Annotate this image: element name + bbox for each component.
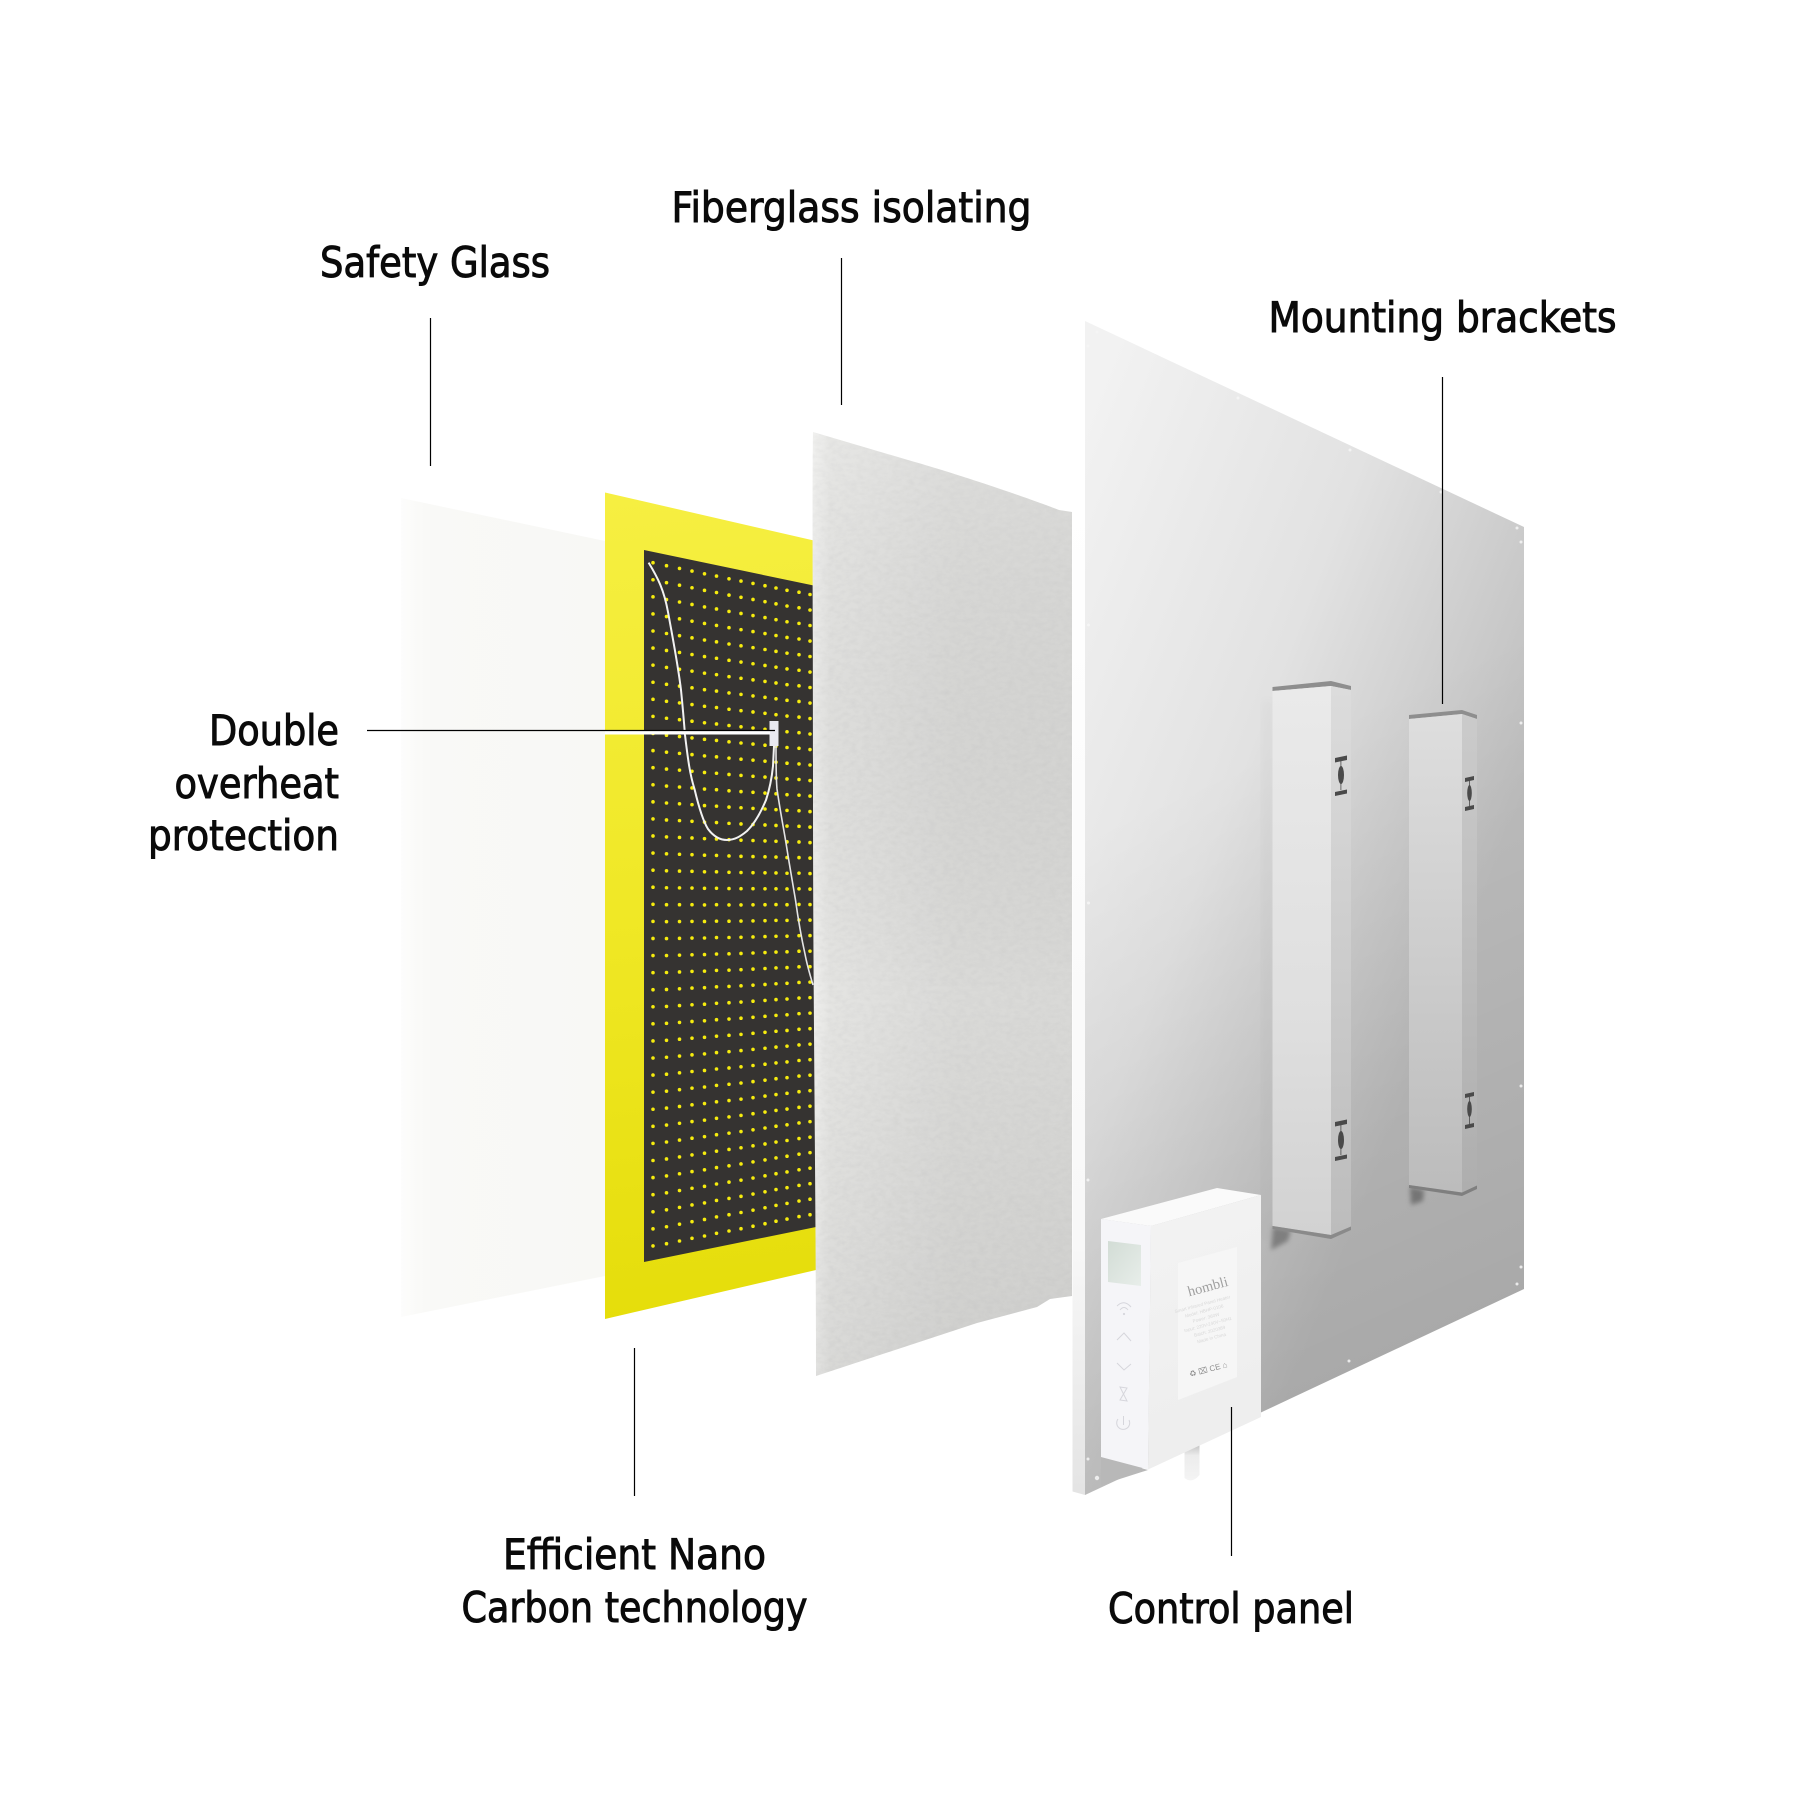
box front face <box>1101 1219 1151 1470</box>
bracket keyhole slots <box>1335 756 1347 1161</box>
panel: nano carbon film layer <box>605 492 816 1319</box>
label: double overheat protection: protection <box>148 811 339 860</box>
display screen <box>1108 1241 1141 1286</box>
plate edge strip <box>1072 505 1085 1495</box>
yellow carbon dots <box>653 563 810 1247</box>
label: fiberglass isolating: Fiberglass isolating <box>672 183 1032 232</box>
icon: wifi <box>1117 1303 1131 1315</box>
dark carbon sheet <box>644 550 816 1262</box>
product label <box>1174 1247 1240 1400</box>
label details: Power: 360W <box>1192 1312 1221 1324</box>
leader line: safety glass <box>430 318 432 466</box>
label: double overheat protection <box>148 706 339 860</box>
label: efficient nano carbon technology: Efficient Nano <box>503 1530 766 1579</box>
label: double overheat protection: Double <box>209 706 339 755</box>
label: double overheat protection: overheat <box>174 759 339 808</box>
certification marks: ♻ ⌧ CE ⌂ <box>1188 1360 1229 1379</box>
overheat sensor <box>770 721 778 746</box>
panel: fiberglass isolating layer <box>813 432 1072 1376</box>
label details: Smart Infrared Panel Heater <box>1174 1294 1231 1314</box>
box side face <box>1148 1195 1261 1470</box>
yellow frame <box>605 492 816 1319</box>
icon: power <box>1117 1416 1130 1429</box>
brand name: hombli <box>1186 1274 1230 1300</box>
panel: back plate <box>1072 321 1524 1495</box>
leader line: mounting brackets <box>1442 377 1444 704</box>
panel: right mounting bracket <box>1409 710 1477 1205</box>
label details: Model: HBHP-0106 <box>1184 1303 1224 1319</box>
label details: Input: 220V-240V~50Hz <box>1184 1316 1233 1333</box>
label: efficient nano carbon technology <box>462 1530 808 1632</box>
panel: control box <box>1101 1188 1261 1485</box>
box shadow <box>1101 1457 1148 1485</box>
icon: up chevron <box>1117 1333 1131 1341</box>
bracket keyhole slots <box>1465 776 1474 1129</box>
label: control panel: Control panel <box>1108 1584 1354 1633</box>
label: mounting brackets: Mounting brackets <box>1268 293 1616 342</box>
plate screws <box>1086 330 1522 1480</box>
icon: down chevron <box>1117 1363 1131 1370</box>
box top face <box>1101 1188 1261 1226</box>
label: efficient nano carbon technology: Carbon technology <box>462 1583 808 1632</box>
icon: hourglass <box>1120 1387 1127 1401</box>
panel: safety glass layer <box>401 498 605 1317</box>
label details: Batch: 2020389 <box>1193 1325 1226 1338</box>
leader line: nano carbon <box>634 1348 636 1496</box>
panel: left mounting bracket <box>1262 681 1351 1250</box>
label details <box>1174 1294 1240 1348</box>
leader line: overheat protection <box>367 730 775 734</box>
sensor wire loop <box>649 563 774 840</box>
label details: Made in China <box>1197 1332 1227 1344</box>
leader line: fiberglass <box>840 258 842 405</box>
sensor wire exit <box>776 746 813 985</box>
label: safety glass: Safety Glass <box>320 238 550 287</box>
leader line: control panel <box>1230 1407 1232 1556</box>
cable stub <box>1184 1442 1200 1480</box>
